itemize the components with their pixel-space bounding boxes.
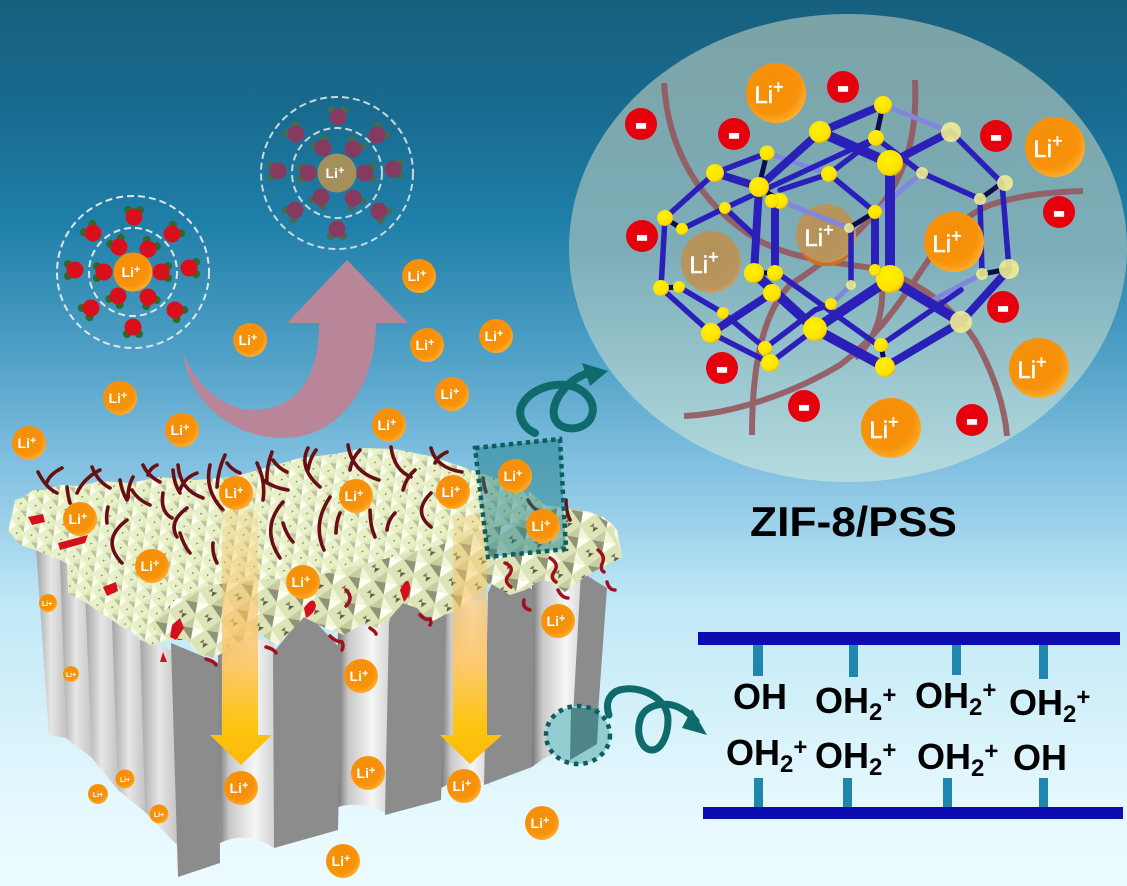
oval background <box>569 14 1127 482</box>
free Li+ ions in the oval: Li <box>1017 357 1036 384</box>
water molecules, faded <box>267 106 404 240</box>
free Li+ ions in the oval <box>746 63 1085 458</box>
Li+ ions above the membrane: + <box>390 417 396 429</box>
side fins <box>36 548 178 846</box>
central Li+ ion, bulk: Li <box>122 264 134 280</box>
linker sticks <box>753 644 1048 808</box>
thin framework bonds <box>661 132 1009 363</box>
squiggly polymer ends <box>206 550 615 665</box>
panel: pore wall chemistry diagram <box>698 632 1123 819</box>
free Li+ ions in the oval: + <box>888 412 899 432</box>
free Li+ ions in the oval: + <box>951 226 962 246</box>
highlight: dotted circle on pore wall <box>546 706 610 764</box>
surface group labels: top row: + <box>882 682 896 709</box>
Li+ ions in and below the channels: + <box>344 853 350 865</box>
Li+ ions on the ZIF-8 layer: Li <box>442 484 454 500</box>
small distant Li+ ions along the side <box>39 594 168 824</box>
free Li+ ions in the oval: + <box>1036 352 1047 372</box>
Li+ ions in and below the channels <box>224 604 575 878</box>
Li+ ions on the ZIF-8 layer: + <box>153 558 159 570</box>
Li+ ions above the membrane: + <box>453 386 459 398</box>
Li+ ions above the membrane: + <box>30 435 36 447</box>
channels <box>218 580 584 848</box>
dark short bonds <box>661 105 1009 367</box>
front pillars <box>171 572 607 877</box>
small distant Li+ ions along the side: Li+ <box>120 777 130 784</box>
yellow atoms <box>653 96 904 377</box>
water molecules, bulk <box>64 206 200 338</box>
Li+ ions above the membrane: Li <box>171 422 183 438</box>
panel: membrane <box>8 445 622 877</box>
encapsulated Li+ ion, left cage: Li <box>689 252 708 279</box>
heading: ZIF-8/PSS: ZIF-8/PSS <box>750 498 957 545</box>
surface group labels: bottom row: 2 <box>869 754 882 781</box>
surface group labels: bottom row: + <box>882 737 896 764</box>
negative sulfonate charges <box>625 68 1075 439</box>
panel: ZIF-8/PSS magnified oval <box>569 14 1127 482</box>
Li+ ions on the ZIF-8 layer: Li <box>141 558 153 574</box>
surface group labels: top row: OH <box>733 676 787 717</box>
Li+ ions above the membrane: Li <box>378 417 390 433</box>
large contrast facets along the front edge <box>150 507 622 658</box>
surface group labels: top row: + <box>982 677 996 704</box>
Li+ ions above the membrane <box>12 259 513 460</box>
negative sulfonate charges: - <box>716 349 728 387</box>
Li+ ions on the ZIF-8 layer: + <box>81 511 87 523</box>
small distant Li+ ions along the side: Li+ <box>93 792 103 799</box>
central Li+ ion, faded: + <box>338 165 344 177</box>
Li+ ions in and below the channels: Li <box>350 668 362 684</box>
negative sulfonate charges: - <box>997 288 1009 326</box>
surface group labels: bottom row <box>726 732 1067 782</box>
Li+ ions above the membrane: Li <box>441 386 453 402</box>
surface group labels: bottom row: 2 <box>780 751 793 778</box>
arrow: curly teal to ZIF-8 oval <box>520 363 608 433</box>
Li+ ions above the membrane: + <box>183 422 189 434</box>
free Li+ ions in the oval: + <box>773 77 784 97</box>
surface group labels: bottom row: OH <box>726 732 780 773</box>
negative sulfonate charges: - <box>636 217 648 255</box>
surface group labels: top row: OH <box>1009 682 1063 723</box>
Li+ ions above the membrane: Li <box>18 435 30 451</box>
surface group labels: bottom row: OH <box>1013 737 1067 778</box>
encapsulated Li+ ion, centre cage: + <box>823 220 834 240</box>
Li+ ions above the membrane: + <box>121 390 127 402</box>
highlight: dotted square on ZIF layer <box>475 439 566 557</box>
central Li+ ion, bulk: + <box>134 264 140 276</box>
arrow: curved pink dehydration arrow <box>183 260 408 438</box>
free Li+ ions in the oval: Li <box>932 231 951 258</box>
pale back bonds <box>767 105 982 304</box>
solvation shells, faded <box>261 97 413 249</box>
negative sulfonate charges: - <box>1053 193 1065 231</box>
Li+ ions above the membrane: Li <box>239 332 251 348</box>
surface group labels: top row: 2 <box>1063 701 1076 728</box>
Li+ ions in and below the channels: Li <box>332 853 344 869</box>
Li+ ions in and below the channels: Li <box>547 613 559 629</box>
Li+ ions on the ZIF-8 layer: + <box>357 488 363 500</box>
surface group labels: bottom row: OH <box>815 735 869 776</box>
small distant Li+ ions along the side: Li+ <box>42 601 52 608</box>
bottom wall bar <box>703 807 1123 819</box>
encapsulated Li+ ion, centre cage <box>796 204 856 266</box>
PSS strands on surface <box>38 445 570 563</box>
Li+ ions in and below the channels: + <box>369 765 375 777</box>
Li+ ions on the ZIF-8 layer: Li <box>504 468 516 484</box>
small distant Li+ ions along the side: Li+ <box>154 812 164 819</box>
central Li+ ion, faded <box>318 154 356 192</box>
PSS polymer chains <box>664 80 1083 436</box>
Li+ ions on the ZIF-8 layer: Li <box>532 518 544 534</box>
encapsulated Li+ ion, left cage: + <box>708 247 719 267</box>
pale back atoms <box>844 122 1019 333</box>
surface group labels: top row: OH <box>815 680 869 721</box>
arrow: Li+ transport channel 1 <box>210 510 272 765</box>
Li+ ions on the ZIF-8 layer: + <box>454 484 460 496</box>
Li+ ions on the ZIF-8 layer: + <box>544 518 550 530</box>
Li+ ions above the membrane: + <box>497 328 503 340</box>
solvation shells, bulk <box>57 196 209 348</box>
Li+ ions above the membrane: Li <box>109 390 121 406</box>
Li+ ions above the membrane: + <box>428 337 434 349</box>
Li+ ions above the membrane: Li <box>416 337 428 353</box>
Li+ ions in and below the channels: + <box>543 815 549 827</box>
Li+ ions above the membrane: Li <box>408 268 420 284</box>
encapsulated Li+ ion, centre cage: Li <box>804 225 823 252</box>
Li+ ions above the membrane: + <box>251 332 257 344</box>
Li+ ions in and below the channels: + <box>242 780 248 792</box>
surface group labels: bottom row: + <box>984 738 998 765</box>
hydrated Li+ cluster (bulk) <box>57 196 209 348</box>
encapsulated Li+ ion, left cage <box>681 231 741 293</box>
surface group labels: bottom row: 2 <box>971 755 984 782</box>
arrow: curly teal to pore wall chemistry <box>607 689 707 750</box>
ZIF-8 framework cage <box>653 96 1019 377</box>
negative sulfonate charges: - <box>635 105 647 143</box>
surface group labels: bottom row: OH <box>917 736 971 777</box>
central Li+ ion, faded: Li <box>326 165 338 181</box>
Li+ ions in and below the channels: Li <box>230 780 242 796</box>
surface group labels: top row: 2 <box>869 699 882 726</box>
surface group labels: top row: OH <box>915 675 969 716</box>
Li+ ions in and below the channels: Li <box>453 778 465 794</box>
Li+ ions on the ZIF-8 layer: Li <box>292 574 304 590</box>
surface group labels: top row <box>733 675 1090 728</box>
negative sulfonate charges: - <box>798 387 810 425</box>
Li+ ions on the ZIF-8 layer: Li <box>69 511 81 527</box>
free Li+ ions in the oval: Li <box>1033 136 1052 163</box>
free Li+ ions in the oval: + <box>1052 131 1063 151</box>
Li+ ions in and below the channels: + <box>559 613 565 625</box>
Li+ ions on the ZIF-8 layer <box>63 459 560 599</box>
red polymer bits <box>28 514 410 662</box>
Li+ ions on the ZIF-8 layer: + <box>304 574 310 586</box>
negative sulfonate charges: - <box>728 115 740 153</box>
Li+ ions in and below the channels: Li <box>357 765 369 781</box>
free Li+ ions in the oval: Li <box>869 417 888 444</box>
small distant Li+ ions along the side: Li+ <box>66 672 76 679</box>
negative sulfonate charges: - <box>990 117 1002 155</box>
surface group labels: bottom row: + <box>793 734 807 761</box>
Li+ ions in and below the channels: + <box>362 668 368 680</box>
Li+ ions on the ZIF-8 layer: Li <box>225 485 237 501</box>
surface group labels: top row: + <box>1076 684 1090 711</box>
arrow: Li+ transport channel 2 <box>440 515 502 764</box>
surface group labels: top row: 2 <box>969 694 982 721</box>
Li+ ions above the membrane: + <box>420 268 426 280</box>
heaviest foreground bonds <box>754 132 961 367</box>
Li+ ions in and below the channels: + <box>465 778 471 790</box>
Li+ ions above the membrane: Li <box>485 328 497 344</box>
ZIF-8 crystal layer <box>8 448 622 658</box>
top wall bar <box>698 632 1120 645</box>
central Li+ ion, bulk <box>114 252 152 292</box>
free Li+ ions in the oval: Li <box>754 82 773 109</box>
Li+ ions on the ZIF-8 layer: + <box>237 485 243 497</box>
hydrated Li+ cluster (faded) <box>261 97 413 249</box>
Li+ ions on the ZIF-8 layer: Li <box>345 488 357 504</box>
Li+ ions in and below the channels: Li <box>531 815 543 831</box>
negative sulfonate charges: - <box>966 401 978 439</box>
negative sulfonate charges: - <box>837 68 849 106</box>
Li+ ions on the ZIF-8 layer: + <box>516 468 522 480</box>
thick front bonds <box>711 105 1009 367</box>
